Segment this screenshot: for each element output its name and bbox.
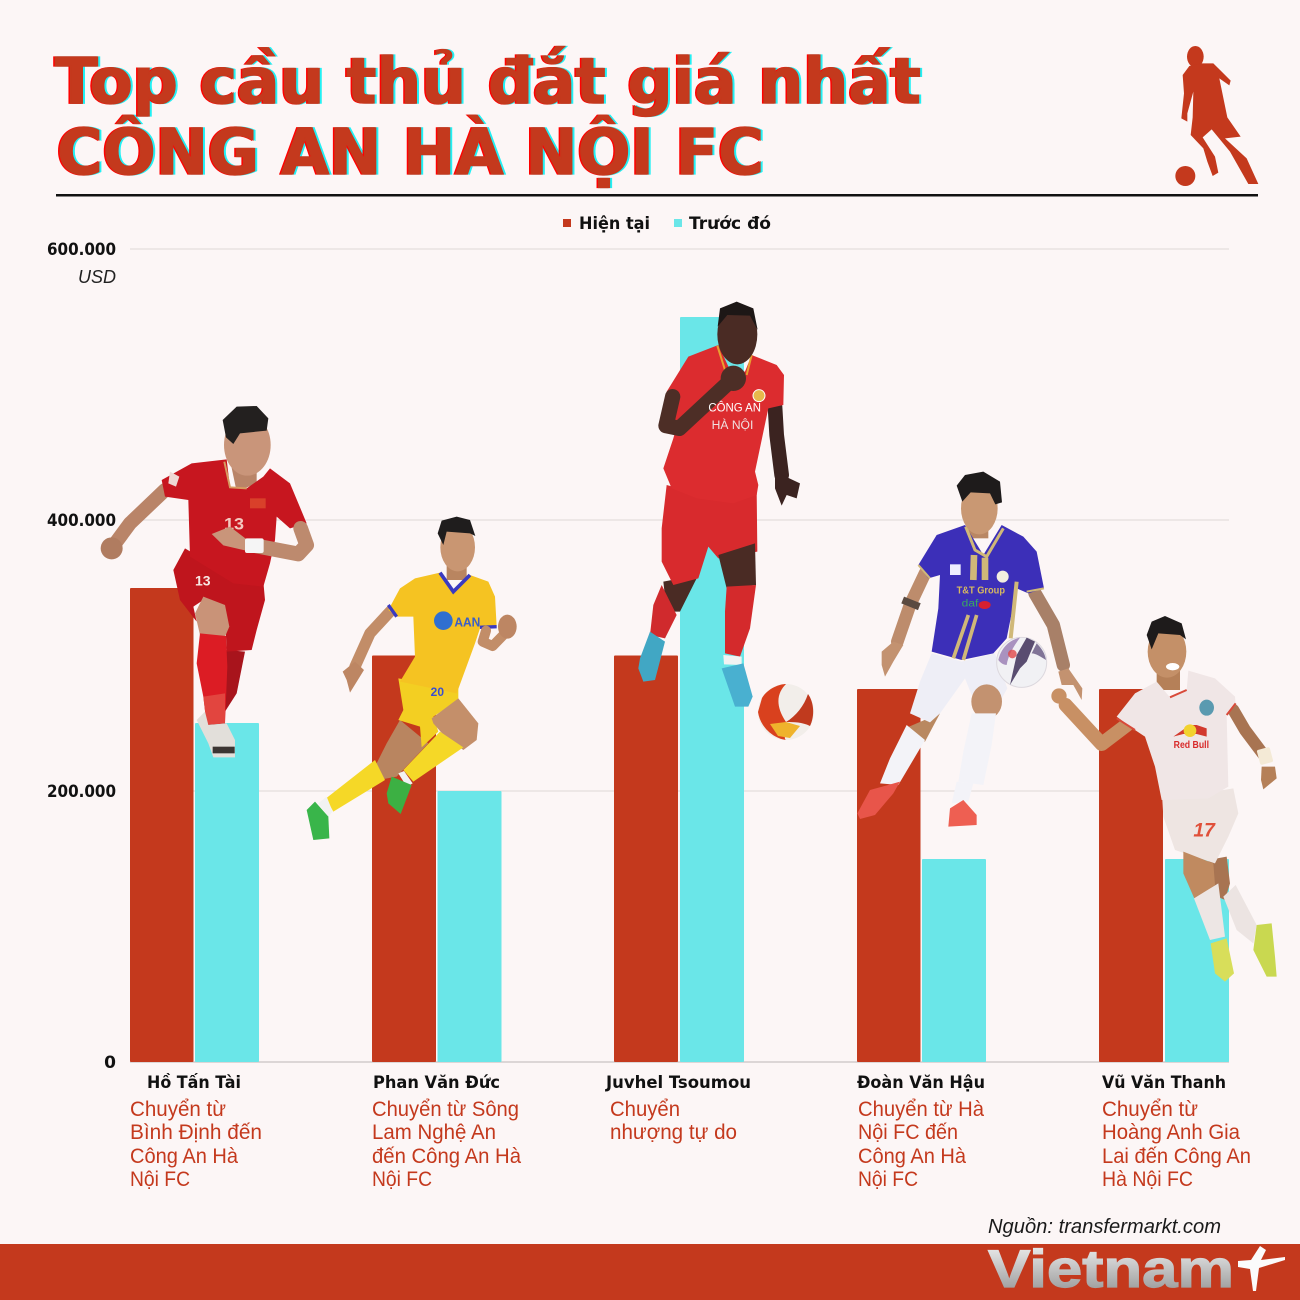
icon: footballer silhouette (1175, 46, 1258, 186)
y axis labels: 600.000 (47, 240, 116, 260)
legend: Hiện tại (579, 214, 650, 234)
transfer note: Phan Văn Đức (372, 1098, 521, 1191)
y axis labels: 200.000 (47, 782, 116, 802)
transfer note: Phan Văn Đức: Nội FC (372, 1168, 432, 1191)
names: Juvhel Tsoumou (605, 1073, 751, 1093)
transfer note: Đoàn Văn Hậu: Chuyển từ Hà (858, 1098, 984, 1121)
player: Đoàn Văn Hậu: daf (962, 599, 979, 610)
player: Vũ Văn Thanh: 17 (1193, 821, 1216, 842)
player: Juvhel Tsoumou: CÔNG AN (708, 399, 761, 414)
transfer note: Phan Văn Đức: Chuyển từ Sông (372, 1098, 519, 1121)
bars: Vũ Văn Thanh (1099, 689, 1229, 1062)
player: Hồ Tấn Tài: 13 (195, 572, 211, 588)
player: Đoàn Văn Hậu: T&T Group (957, 585, 1005, 596)
transfer note: Hồ Tấn Tài: Chuyển từ (130, 1098, 226, 1121)
ball: white match ball (997, 637, 1047, 687)
names: Vũ Văn Thanh (1102, 1073, 1226, 1093)
legend: Trước đó (689, 214, 771, 234)
player: Hồ Tấn Tài: 13 (224, 514, 244, 533)
y axis labels (47, 240, 116, 1073)
player: Vũ Văn Thanh: Red Bull (1174, 740, 1209, 751)
transfer note: Đoàn Văn Hậu (858, 1098, 984, 1191)
names: Phan Văn Đức (373, 1073, 500, 1093)
names (147, 1072, 1226, 1093)
transfer note: Hồ Tấn Tài: Bình Định đến (130, 1121, 262, 1144)
player: Phan Văn Đức: AAN (454, 616, 480, 630)
title (55, 45, 921, 189)
title: Top cầu thủ đắt giá nhất (55, 45, 921, 118)
bars: Đoàn Văn Hậu (857, 689, 986, 1062)
player: Phan Văn Đức: 20 (431, 685, 444, 699)
player: Hồ Tấn Tài (101, 406, 307, 757)
y axis labels: 0 (104, 1053, 116, 1073)
source: Nguồn: transfermarkt.com (988, 1216, 1221, 1238)
footer band (0, 1244, 1300, 1300)
transfer note: Hồ Tấn Tài: Công An Hà (130, 1145, 238, 1168)
title divider (56, 194, 1258, 196)
player: Vũ Văn Thanh (1051, 616, 1277, 982)
ball: orange match ball (758, 684, 814, 740)
transfer note: Vũ Văn Thanh: Hoàng Anh Gia (1102, 1121, 1240, 1144)
transfer note: Vũ Văn Thanh: Hà Nội FC (1102, 1168, 1193, 1191)
player: Phan Văn Đức (307, 517, 517, 840)
y axis labels: 400.000 (47, 511, 116, 531)
transfer note: Vũ Văn Thanh: Chuyển từ (1102, 1098, 1198, 1121)
names: Hồ Tấn Tài (147, 1072, 241, 1093)
logo: Vietnam+ (988, 1240, 1285, 1299)
transfer note: Vũ Văn Thanh (1102, 1098, 1251, 1191)
bars: Juvhel Tsoumou (614, 317, 744, 1062)
transfer note: Juvhel Tsoumou: nhượng tự do (610, 1121, 737, 1144)
transfer note: Hồ Tấn Tài (130, 1098, 262, 1191)
legend (563, 214, 771, 234)
transfer note: Đoàn Văn Hậu: Công An Hà (858, 1145, 966, 1168)
transfer note: Phan Văn Đức: đến Công An Hà (372, 1145, 521, 1168)
y axis grid lines (130, 249, 1229, 1062)
title: CÔNG AN HÀ NỘI FC (57, 116, 764, 189)
transfer note: Đoàn Văn Hậu: Nội FC (858, 1168, 918, 1191)
transfer note: Phan Văn Đức: Lam Nghệ An (372, 1121, 496, 1144)
bars: Phan Văn Đức (372, 656, 502, 1062)
player: Juvhel Tsoumou (638, 302, 800, 707)
transfer note: Đoàn Văn Hậu: Nội FC đến (858, 1121, 958, 1144)
transfer note: Juvhel Tsoumou (610, 1098, 737, 1144)
bars: Hồ Tấn Tài (130, 588, 259, 1062)
bar chart (130, 317, 1229, 1062)
names: Đoàn Văn Hậu (857, 1073, 985, 1093)
transfer note: Juvhel Tsoumou: Chuyển (610, 1098, 680, 1121)
player: Đoàn Văn Hậu (857, 472, 1082, 827)
transfer note: Vũ Văn Thanh: Lai đến Công An (1102, 1145, 1251, 1168)
y axis labels: USD (78, 267, 116, 287)
logo: Vietnam+: Vietnam (988, 1240, 1234, 1299)
transfer note: Hồ Tấn Tài: Nội FC (130, 1168, 190, 1191)
player: Juvhel Tsoumou: HÀ NỘI (712, 417, 753, 432)
